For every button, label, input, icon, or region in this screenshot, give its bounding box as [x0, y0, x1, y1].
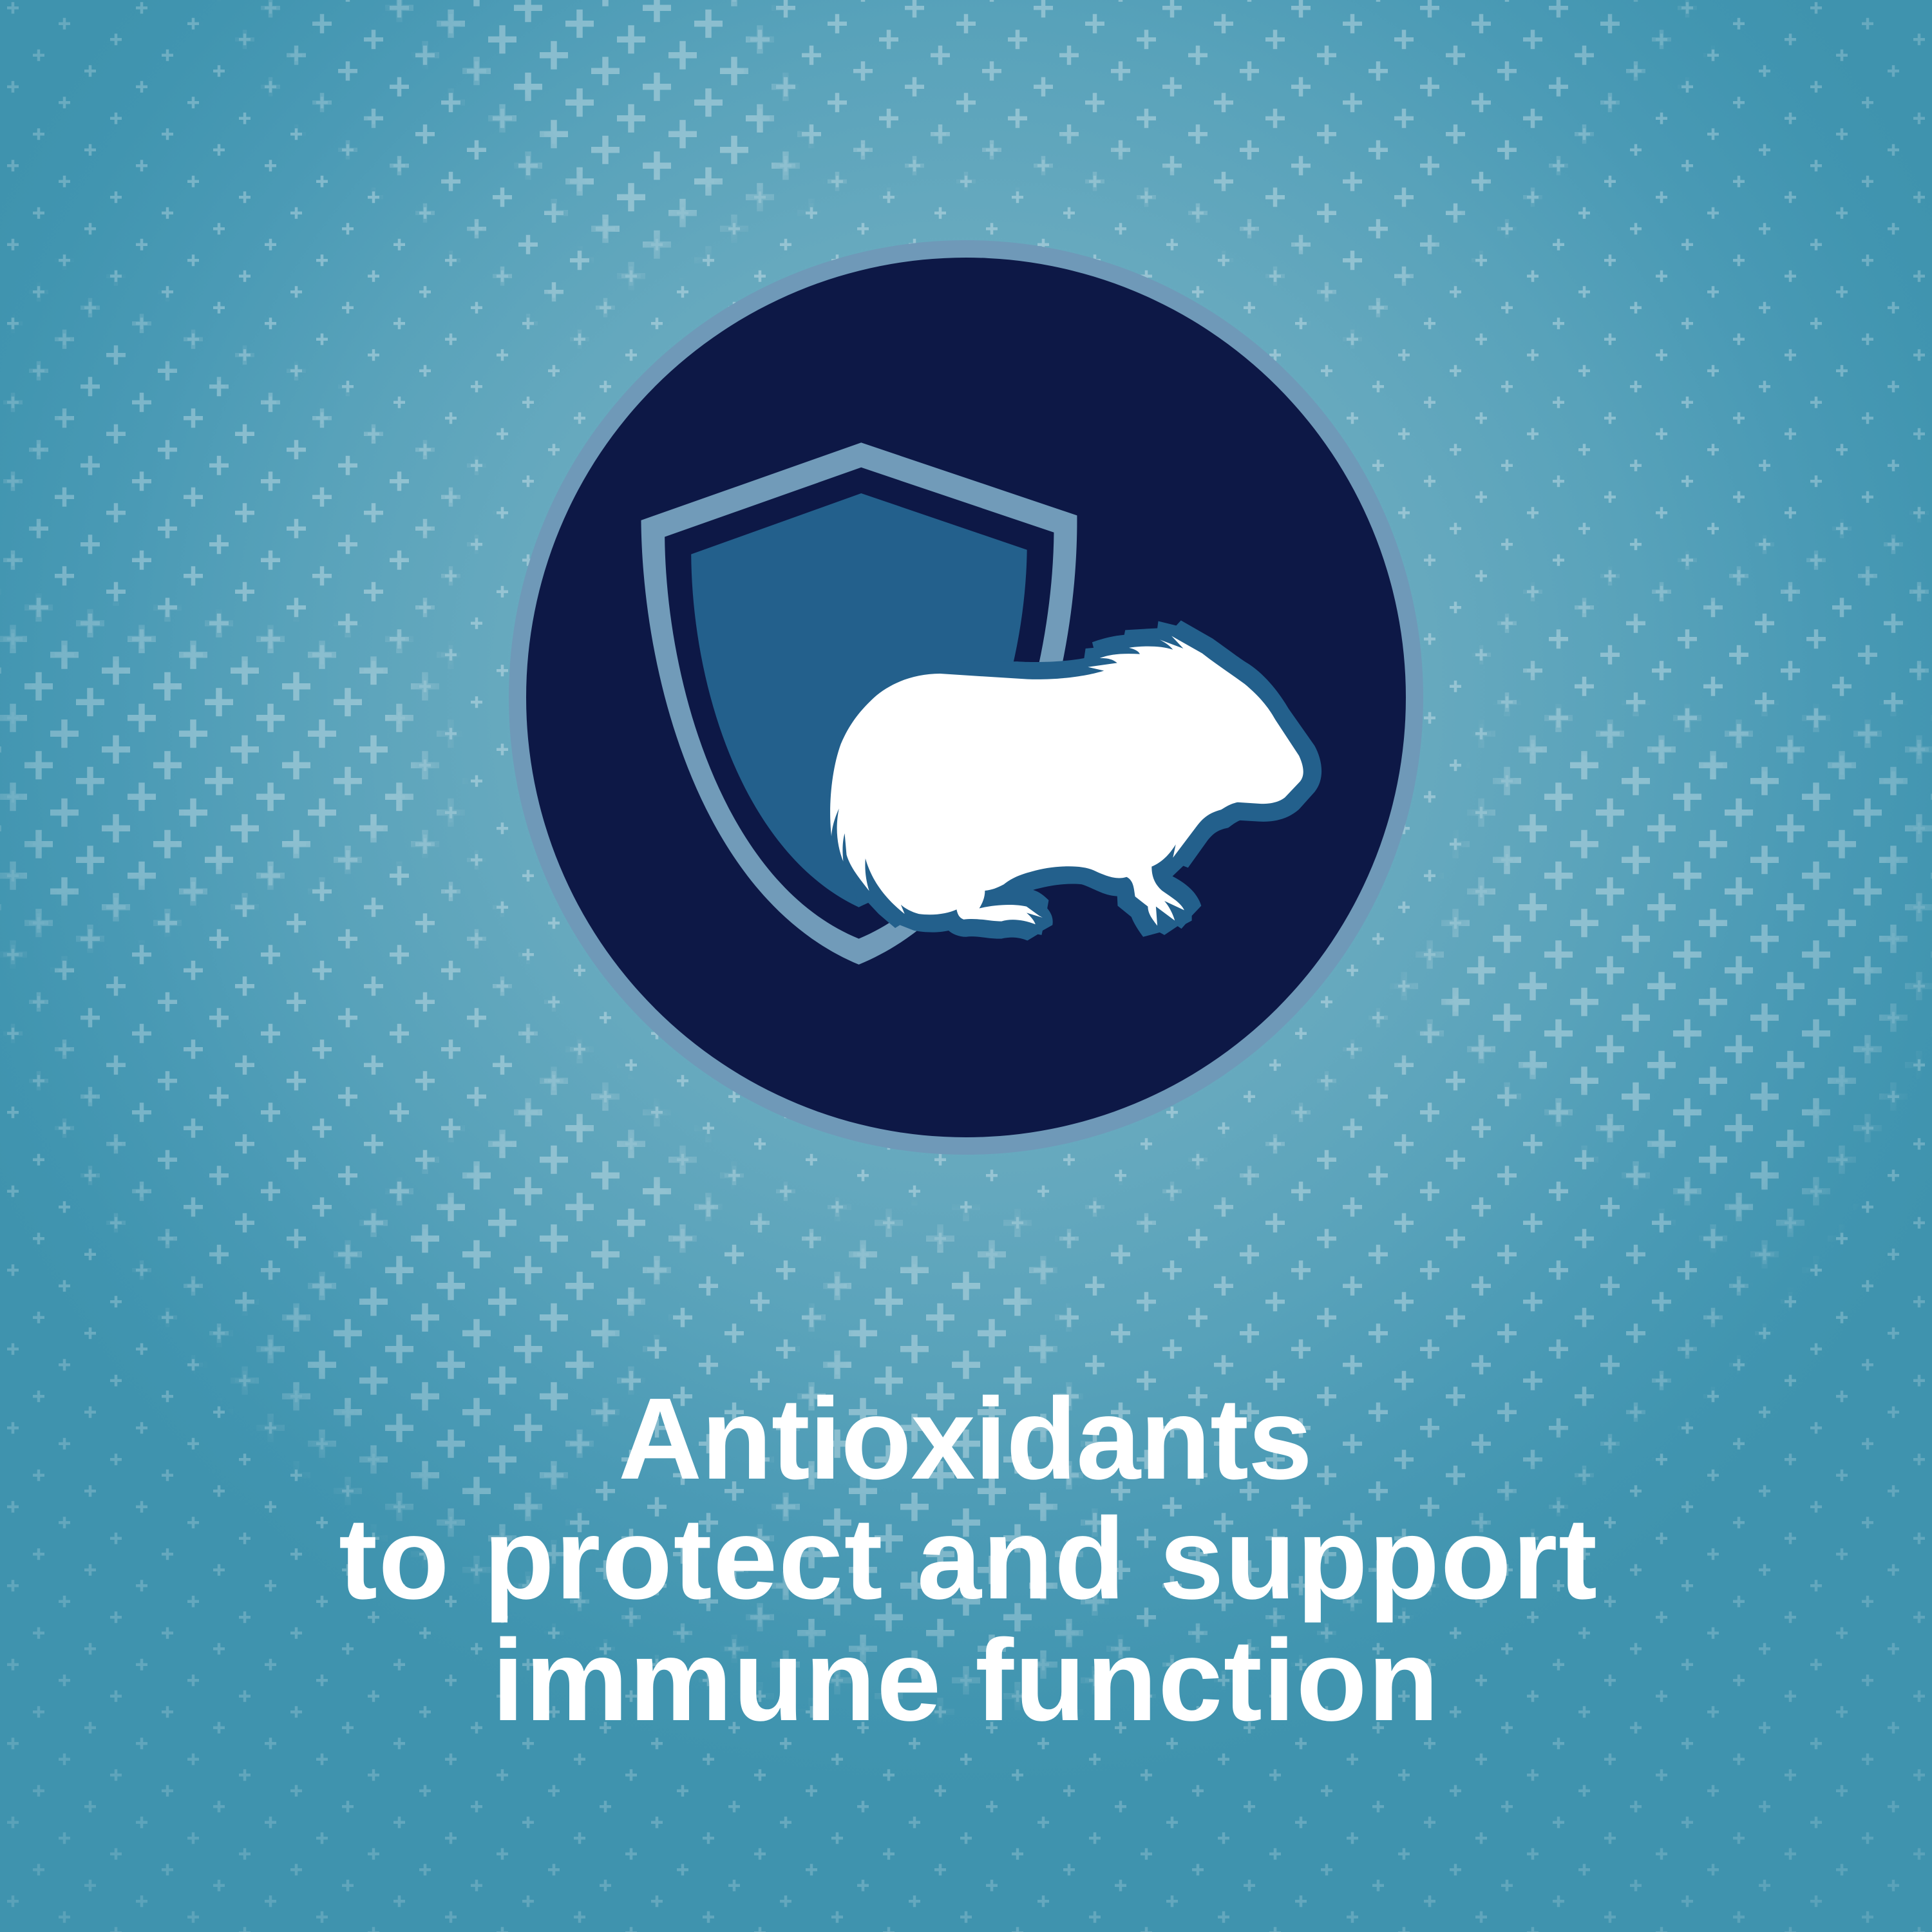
- headline line 1: Antioxidants: [618, 1374, 1312, 1504]
- headline line 3: immune function: [492, 1616, 1439, 1745]
- headline: [339, 1374, 1597, 1745]
- headline line 2: to protect and support: [339, 1494, 1597, 1624]
- icon: shield outer ring: [641, 442, 1077, 965]
- icon: guinea pig silhouette: [830, 636, 1303, 926]
- icon: shield inner fill: [691, 493, 1027, 907]
- icon: shield and guinea pig: [641, 442, 1321, 965]
- badge: navy circle with pale ring: [509, 240, 1423, 1155]
- icon: guinea pig outline: [848, 620, 1321, 940]
